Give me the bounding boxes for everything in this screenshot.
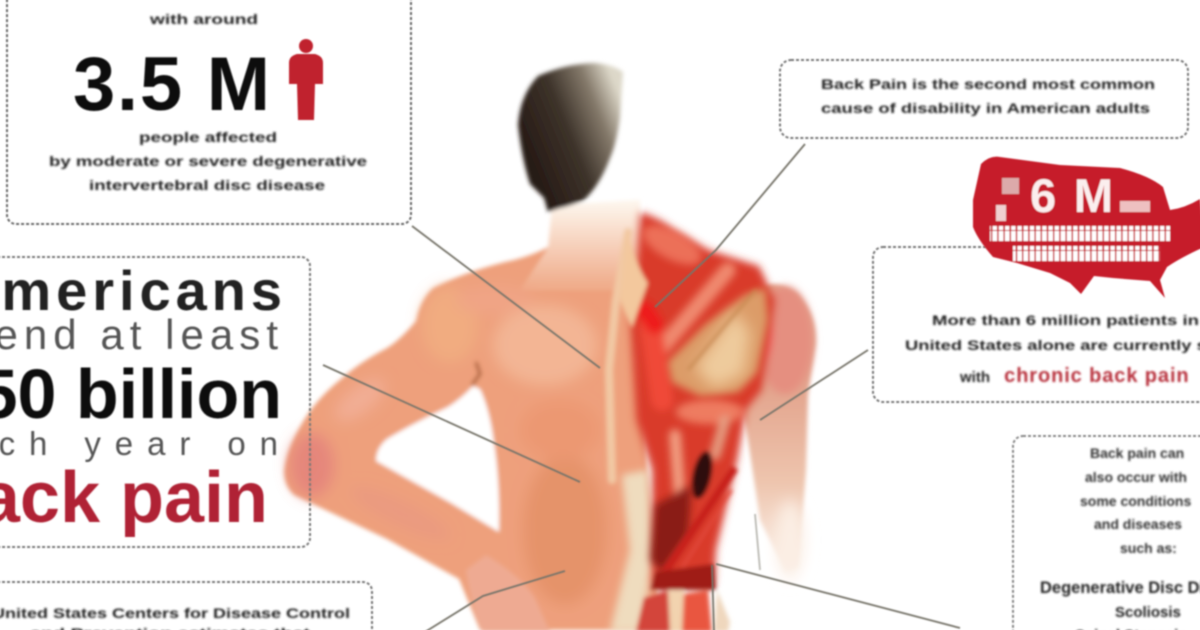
hair xyxy=(518,63,623,212)
panel: Americans spend at least $50 billion xyxy=(0,257,310,547)
skin: left side of torso and arm xyxy=(284,222,660,630)
text: United States Centers: United States Centers for Disease Control xyxy=(0,605,350,621)
lower spine xyxy=(610,470,655,630)
muscles: strands xyxy=(637,218,744,500)
scapula xyxy=(668,288,768,396)
text: and diseases: and diseases xyxy=(1094,516,1182,532)
dark red lower muscle xyxy=(650,485,692,572)
glutes xyxy=(636,590,730,630)
text: with chronic back pain: with chronic back pain xyxy=(959,365,1190,387)
deltoid xyxy=(742,286,813,394)
gap between arm and torso xyxy=(376,386,499,532)
text: United States alone: United States alone are currently suffering xyxy=(905,337,1200,353)
neck xyxy=(520,200,642,290)
text: by moderate or severe: by moderate or severe degenerative xyxy=(49,153,367,169)
dark cavity xyxy=(688,450,716,500)
text: also occur with: also occur with xyxy=(1085,469,1187,485)
text: Back Pain is the second: Back Pain is the second most common xyxy=(821,76,1155,92)
icon: red person xyxy=(289,39,323,120)
stat: 6 M: 6 M xyxy=(1030,169,1113,222)
hand on hip xyxy=(466,555,550,630)
connector lines xyxy=(323,144,960,630)
panel: 3.5 M people affected xyxy=(7,0,411,224)
spine band xyxy=(609,232,628,480)
panel: second most common cause xyxy=(780,60,1188,138)
text: Scoliosis: Scoliosis xyxy=(1115,604,1181,621)
text: such as: such as: xyxy=(1120,540,1177,556)
panel: CDC note xyxy=(0,582,372,630)
panel: associated conditions xyxy=(1013,436,1200,630)
panel: 6 million patients xyxy=(873,157,1200,402)
text: people affected: people affected xyxy=(139,129,277,145)
right arm and shoulder xyxy=(740,284,816,572)
stat: 3.5 M: 3.5 M xyxy=(73,42,270,127)
text: Back pain can: Back pain can xyxy=(1090,445,1184,461)
armpit shadow xyxy=(472,362,480,385)
arm edge fade xyxy=(776,500,804,580)
text: cause of disability: cause of disability in American adults xyxy=(821,100,1150,116)
map: USA in red xyxy=(973,157,1200,298)
muscles: red back base xyxy=(630,212,775,585)
text: intervertebral disc disease: intervertebral disc disease xyxy=(89,177,325,193)
neck tendon xyxy=(620,228,648,328)
figure: human back with exposed muscles xyxy=(284,63,816,630)
text: with around: with around xyxy=(149,11,258,27)
text: some conditions: some conditions xyxy=(1080,493,1191,509)
skin shading xyxy=(290,285,607,605)
text: More than 6 million: More than 6 million patients in the xyxy=(932,312,1200,328)
